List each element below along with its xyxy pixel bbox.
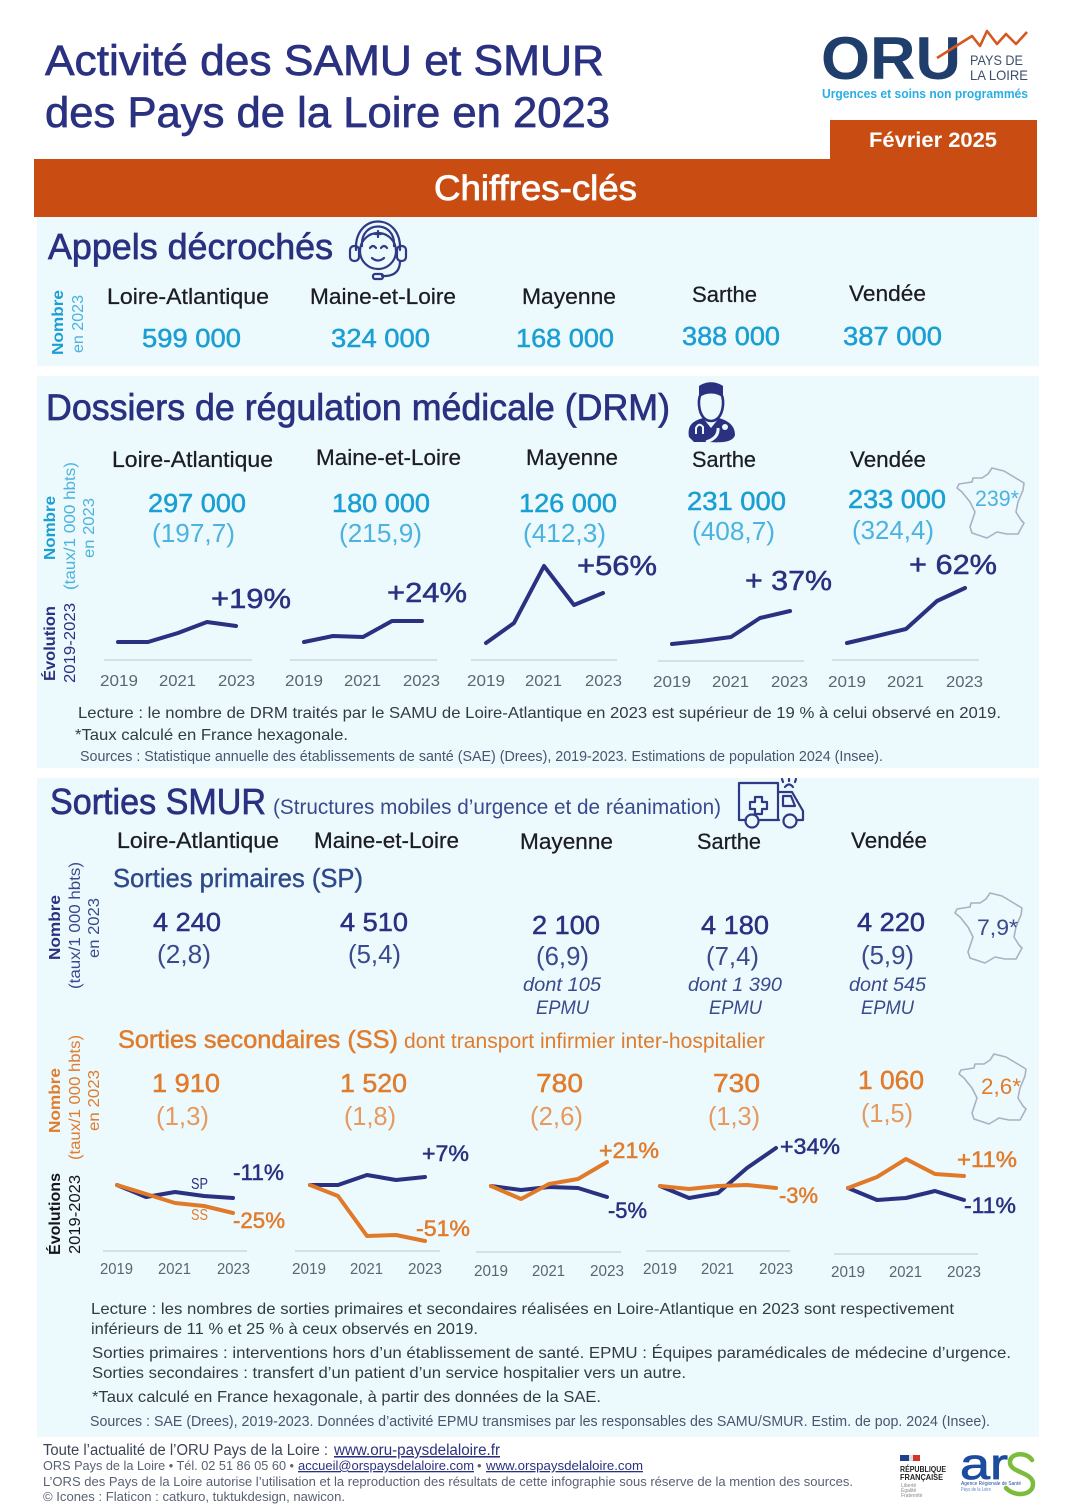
logo: République française: Égalité (901, 1487, 917, 1494)
chart: Vendée: 2021 (887, 674, 924, 691)
SP counts: 2 100 (532, 910, 600, 940)
chart: SP/SS Mayenne (474, 1138, 659, 1280)
panel: Sorties SMUR (37, 778, 1039, 1437)
chart: SP/SS Mayenne: 2019 (474, 1263, 508, 1280)
side label: Nombre (42, 462, 98, 590)
chart: Maine-et-Loire: 2021 (344, 673, 381, 690)
department names: Sarthe (697, 829, 761, 854)
side label: Nombre en 2023: Nombre (50, 290, 67, 355)
footer credits: www.orspaysdelaloire.com (485, 1458, 643, 1473)
DRM counts (148, 484, 946, 518)
reading notes and sources: inférieurs de 11 % et 25 % à ceux observés en 2019. (91, 1321, 478, 1338)
side label: Évolutions: 2019-2023 (67, 1175, 84, 1254)
SP rates (157, 939, 914, 971)
chart: Mayenne: +56% (577, 550, 657, 581)
footer credits (43, 1442, 853, 1504)
chart: SP/SS Sarthe: 2021 (701, 1261, 734, 1278)
chart: SP/SS Vendée: 2021 (889, 1264, 922, 1281)
date tab: Février 2025 (869, 129, 997, 152)
side label: Évolution (40, 603, 79, 683)
EPMU notes: EPMU (861, 998, 914, 1019)
SS rates: (1,8) (344, 1101, 396, 1131)
chart: SP/SS Vendée: 2019 (831, 1264, 865, 1281)
department names: Loire-Atlantique (117, 828, 279, 853)
chart: Vendée: + 62% (909, 549, 997, 580)
reading note and sources: Sources : Statistique annuelle des établissements de santé (SAE) (Drees), 2019-2023. Estimations de population 2024 (Insee). (80, 748, 883, 765)
title (45, 37, 610, 137)
department names: Maine-et-Loire (314, 828, 459, 853)
call counts (142, 321, 942, 353)
date tab (830, 120, 1037, 160)
chart: SP/SS Sarthe: +34% (780, 1134, 840, 1159)
logo: ORU Pays de la Loire: PAYS DE (970, 52, 1023, 68)
SS rates: (1,3) (156, 1101, 209, 1131)
logo: République française: Liberté (901, 1483, 917, 1489)
SS counts (152, 1065, 924, 1098)
footer credits: Toute l’actualité de l’ORU Pays de la Loire : (43, 1442, 328, 1459)
department names: Sarthe (692, 447, 756, 472)
side label: Évolutions: Évolutions (45, 1173, 64, 1255)
footer credits: accueil@orspaysdelaloire.com (298, 1458, 474, 1473)
logo: ORU Pays de la Loire: Urgences et soins non programmés (822, 87, 1028, 101)
chart: SP/SS Vendée: 2023 (947, 1264, 981, 1281)
SS rates (156, 1098, 913, 1131)
chart: Mayenne (467, 550, 657, 690)
reading notes and sources (90, 1301, 1011, 1430)
chart: SP/SS Loire-Atlantique: -11% (233, 1160, 284, 1185)
chart: SP/SS Maine-et-Loire (292, 1141, 470, 1278)
department names (107, 281, 926, 309)
heading: Sorties SMUR: Sorties SMUR (50, 781, 266, 822)
chart: Vendée: 2019 (828, 674, 866, 691)
heading: Sorties SMUR (50, 781, 721, 822)
department names: Mayenne (520, 829, 613, 854)
DRM rates: (215,9) (339, 518, 422, 548)
SP rates: (5,9) (861, 940, 914, 970)
footer credits: © Icones : Flaticon : catkuro, tuktukdesign, nawicon. (43, 1489, 345, 1504)
reading notes and sources: Sorties primaires : interventions hors d’un établissement de santé. EPMU : Équipes paramédicales de médecine d’urgence. (92, 1343, 1011, 1362)
reading notes and sources: *Taux calculé en France hexagonale, à partir des données de la SAE. (92, 1389, 601, 1406)
call counts: 388 000 (682, 321, 780, 351)
DRM rates (152, 515, 934, 548)
EPMU notes (523, 975, 926, 1019)
banner: Chiffres-clés (34, 159, 1037, 217)
SP counts: 4 240 (153, 907, 221, 937)
reading notes and sources: Lecture : les nombres de sorties primaires et secondaires réalisées en Loire-Atlantique en 2023 sont respectivement (91, 1301, 955, 1318)
SS counts: 780 (536, 1068, 583, 1098)
SP rates: (6,9) (536, 941, 589, 971)
logo: République française: RÉPUBLIQUE (900, 1465, 947, 1474)
reading note and sources: *Taux calculé en France hexagonale. (75, 727, 348, 744)
chart: SP/SS Loire-Atlantique (100, 1160, 285, 1278)
DRM rates: (324,4) (852, 515, 934, 545)
DRM rates: (197,7) (152, 518, 235, 548)
department names: Loire-Atlantique (112, 447, 273, 472)
side label: Nombre SP: en 2023 (86, 898, 103, 958)
SP rates: (2,8) (157, 939, 211, 969)
DRM counts: 180 000 (332, 488, 430, 518)
side label: Évolution: 2019-2023 (62, 603, 79, 683)
chart: Maine-et-Loire: +24% (387, 577, 467, 608)
chart: Maine-et-Loire (285, 577, 467, 690)
chart: Loire-Atlantique: 2023 (218, 673, 255, 690)
chart: Mayenne: 2019 (467, 673, 505, 690)
France map: 239: 239* (975, 486, 1019, 511)
subheading: Sorties primaires: Sorties primaires (SP) (113, 863, 363, 893)
department names (117, 828, 927, 854)
France map: 7,9: 7,9* (977, 915, 1018, 940)
France map: 2,6 (959, 1054, 1026, 1124)
chart: SP/SS Loire-Atlantique: SS (191, 1207, 208, 1224)
department names (112, 445, 926, 472)
chart: Sarthe: + 37% (745, 565, 832, 596)
side label: Évolution: Évolution (40, 606, 59, 681)
SS rates: (1,3) (708, 1101, 760, 1131)
side label: Nombre SP: (taux/1 000 hbts) (67, 862, 84, 989)
DRM counts: 233 000 (848, 484, 946, 514)
side label: Nombre SP: Nombre (47, 895, 64, 960)
heading: DRM: Dossiers de régulation médicale (DRM) (46, 387, 670, 428)
logo: République française (900, 1455, 947, 1499)
chart: Sarthe: 2021 (712, 674, 749, 691)
chart: Loire-Atlantique: 2019 (100, 673, 138, 690)
chart: SP/SS Sarthe: 2019 (643, 1261, 677, 1278)
chart: SP/SS Vendée (831, 1147, 1017, 1281)
chart: Maine-et-Loire: 2019 (285, 673, 323, 690)
chart: SP/SS Mayenne: -5% (608, 1198, 647, 1223)
SP rates: (5,4) (348, 939, 401, 969)
footer credits: L’ORS des Pays de la Loire autorise l’utilisation et la reproduction des résultats de cette infographie sous réserve de la mention des sources. (43, 1474, 853, 1489)
chart: SP/SS Vendée: -11% (964, 1193, 1016, 1218)
SP counts (153, 907, 925, 940)
chart: Vendée (828, 549, 997, 691)
side label: Nombre SS: en 2023 (86, 1070, 103, 1131)
DRM counts: 297 000 (148, 488, 246, 518)
EPMU notes: EPMU (709, 998, 762, 1019)
footer credits: www.oru-paysdelaloire.fr (333, 1442, 500, 1459)
side label: Nombre en 2023 (50, 290, 87, 355)
SP counts: 4 510 (340, 907, 408, 937)
title: des Pays de la Loire en 2023 (45, 89, 610, 137)
logo: ARS Pays de la Loire: Agence Régionale de Santé (961, 1481, 1021, 1487)
DRM rates: (412,3) (523, 518, 606, 548)
chart: Loire-Atlantique: 2021 (159, 673, 196, 690)
logo: ORU Pays de la Loire (821, 25, 1028, 101)
footer credits: • (477, 1458, 482, 1473)
chart: Loire-Atlantique (100, 583, 291, 690)
banner: Chiffres-clés: Chiffres-clés (434, 169, 637, 208)
side label: Évolutions (45, 1173, 84, 1255)
France map: 2,6: 2,6* (981, 1074, 1021, 1099)
side label: Nombre: (taux/1 000 hbts) (62, 462, 79, 590)
icon: operator with headset (350, 222, 406, 279)
reading note and sources (75, 705, 1001, 765)
chart: SP/SS Maine-et-Loire: +7% (422, 1141, 469, 1166)
department names: Maine-et-Loire (310, 284, 456, 309)
chart: Sarthe: 2023 (771, 674, 808, 691)
chart: SP/SS Maine-et-Loire: 2021 (350, 1261, 383, 1278)
SP counts: 4 220 (857, 907, 925, 937)
department names: Vendée (850, 447, 926, 472)
chart: SP/SS Loire-Atlantique: -25% (233, 1208, 285, 1233)
icon: doctor (689, 382, 735, 442)
call counts: 599 000 (142, 323, 241, 353)
chart: Sarthe: 2019 (653, 674, 691, 691)
reading notes and sources: Sorties secondaires : transfert d’un patient d’un service hospitalier vers un autre. (92, 1365, 686, 1382)
logo: ARS Pays de la Loire (960, 1440, 1033, 1494)
chart: SP/SS Mayenne: +21% (599, 1138, 659, 1163)
heading: Appels décrochés: Appels décrochés (48, 226, 333, 267)
department names: Mayenne (526, 445, 618, 470)
SS rates: (1,5) (861, 1098, 913, 1128)
chart: SP/SS Maine-et-Loire: 2023 (408, 1261, 442, 1278)
EPMU notes: dont 545 (849, 975, 926, 996)
side label: Nombre SS (47, 1035, 103, 1160)
chart: SP/SS Sarthe: -3% (779, 1183, 818, 1208)
department names: Maine-et-Loire (316, 445, 461, 470)
chart: SP/SS Loire-Atlantique: 2021 (158, 1261, 191, 1278)
side label: Nombre SS: Nombre (47, 1068, 64, 1133)
side label: Nombre SS: (taux/1 000 hbts) (67, 1035, 84, 1160)
call counts: 324 000 (331, 323, 430, 353)
France map: 7,9 (955, 893, 1022, 963)
logo: République française: Fraternité (901, 1493, 923, 1499)
France map: 239 (957, 468, 1024, 538)
DRM rates: (408,7) (692, 516, 775, 546)
logo: ORU Pays de la Loire: LA LOIRE (970, 67, 1028, 83)
side label: Nombre en 2023: en 2023 (70, 295, 87, 353)
EPMU notes: dont 1 390 (688, 975, 782, 996)
chart: SP/SS Mayenne: 2023 (590, 1263, 624, 1280)
SP counts: 4 180 (701, 910, 769, 940)
chart: SP/SS Vendée: +11% (957, 1147, 1017, 1172)
chart: SP/SS Sarthe (643, 1134, 840, 1278)
logo: ARS Pays de la Loire: ar (960, 1440, 1008, 1489)
SS counts: 1 520 (340, 1068, 407, 1098)
EPMU notes: dont 105 (523, 975, 601, 996)
chart: SP/SS Loire-Atlantique: SP (191, 1176, 208, 1193)
SP rates: (7,4) (706, 941, 759, 971)
chart: SP/SS Maine-et-Loire: -51% (416, 1216, 470, 1241)
call counts: 168 000 (516, 323, 614, 353)
icon: ambulance (739, 779, 803, 828)
subheading: Sorties secondaires: Sorties secondaires (SS) (118, 1026, 398, 1054)
DRM counts: 126 000 (519, 488, 617, 518)
department names: Mayenne (522, 284, 616, 309)
chart: SP/SS Maine-et-Loire: 2019 (292, 1261, 326, 1278)
side label: Nombre: Nombre (42, 496, 59, 560)
DRM counts: 231 000 (687, 486, 786, 516)
call counts: 387 000 (843, 321, 942, 351)
chart: Mayenne: 2021 (525, 673, 562, 690)
chart: Maine-et-Loire: 2023 (403, 673, 440, 690)
panel: Dossiers de régulation médicale (37, 376, 1039, 768)
SS counts: 1 060 (858, 1065, 924, 1095)
logo: ARS Pays de la Loire: Pays de la Loire (961, 1487, 991, 1493)
department names: Loire-Atlantique (107, 284, 269, 309)
side label: Nombre SP (47, 862, 103, 989)
chart: Sarthe (653, 565, 832, 691)
reading note and sources: Lecture : le nombre de DRM traités par le SAMU de Loire-Atlantique en 2023 est supérieur de 19 % à celui observé en 2019. (78, 705, 1001, 722)
logo: République française: FRANÇAISE (900, 1473, 944, 1482)
chart: SP/SS Loire-Atlantique: 2023 (217, 1261, 250, 1278)
SS rates: (2,6) (530, 1101, 583, 1131)
heading: Sorties SMUR: (Structures mobiles d’urgence et de réanimation) (273, 796, 721, 819)
SS counts: 730 (713, 1068, 760, 1098)
chart: Vendée: 2023 (946, 674, 983, 691)
reading notes and sources: Sources : SAE (Drees), 2019-2023. Données d’activité EPMU transmises par les responsables des SAMU/SMUR. Estim. de pop. 2024 (Insee). (90, 1413, 990, 1430)
chart: Mayenne: 2023 (585, 673, 622, 690)
chart: Loire-Atlantique: +19% (211, 583, 291, 614)
title: Activité des SAMU et SMUR (45, 37, 604, 85)
chart: SP/SS Mayenne: 2021 (532, 1263, 565, 1280)
side label: Nombre: en 2023 (81, 498, 98, 558)
EPMU notes: EPMU (536, 998, 589, 1019)
panel: Appels décrochés (37, 217, 1039, 366)
subheading: Sorties secondaires: dont transport infirmier inter-hospitalier (404, 1030, 765, 1053)
chart: SP/SS Sarthe: 2023 (759, 1261, 793, 1278)
department names: Vendée (851, 828, 927, 853)
department names: Vendée (849, 281, 926, 306)
subheading: Sorties secondaires (118, 1026, 765, 1054)
department names: Sarthe (692, 282, 757, 307)
SS counts: 1 910 (152, 1068, 220, 1098)
chart: SP/SS Loire-Atlantique: 2019 (100, 1261, 133, 1278)
logo: ORU Pays de la Loire: ORU (821, 25, 961, 92)
footer credits: ORS Pays de la Loire • Tél. 02 51 86 05 60 • (43, 1458, 294, 1473)
